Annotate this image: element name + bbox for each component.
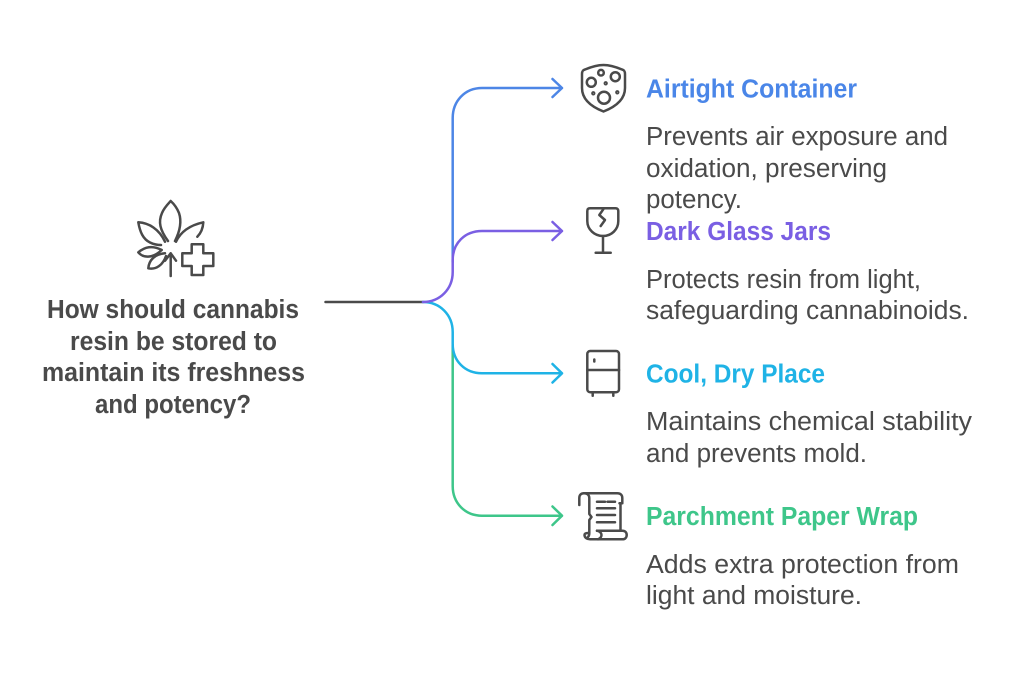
arrow: to Parchment Paper Wrap [453,345,562,525]
icon: shield with bubbles [582,65,625,112]
title: resin be stored to [70,328,277,356]
block: Cool, Dry Place: and prevents mold. [646,440,867,468]
icon: refrigerator [587,351,619,396]
block: Parchment Paper Wrap [646,503,959,610]
block: Parchment Paper Wrap: light and moisture. [646,582,862,610]
block: Airtight Container: Airtight Container [646,76,857,104]
icon: broken wine glass [587,208,618,253]
arrow: to Dark Glass Jars [423,222,562,302]
block: Airtight Container [646,76,948,214]
block: Cool, Dry Place: Maintains chemical stability [646,408,972,436]
block: Cool, Dry Place: Cool, Dry Place [646,360,825,388]
block: Dark Glass Jars: safeguarding cannabinoids. [646,297,969,325]
block: Dark Glass Jars: Protects resin from light, [646,266,921,294]
block: Parchment Paper Wrap: Adds extra protection from [646,551,959,579]
block: Dark Glass Jars [646,218,969,325]
arrow: to Cool, Dry Place [423,302,562,382]
connector: stem [326,301,423,303]
block: Airtight Container: Prevents air exposure and [646,123,948,151]
title: and potency? [95,391,251,419]
arrow: to Airtight Container [453,79,562,262]
title: How should cannabis [47,296,299,324]
block: Cool, Dry Place [646,360,972,468]
icon: cannabis leaf with arrow and plus [138,201,213,276]
block: Parchment Paper Wrap: Parchment Paper Wrap [646,503,918,531]
title [42,296,305,419]
icon: parchment scroll [579,493,627,539]
block: Airtight Container: potency. [646,186,742,214]
title: maintain its freshness [42,359,305,387]
block: Dark Glass Jars: Dark Glass Jars [646,218,831,246]
block: Airtight Container: oxidation, preserving [646,155,887,183]
